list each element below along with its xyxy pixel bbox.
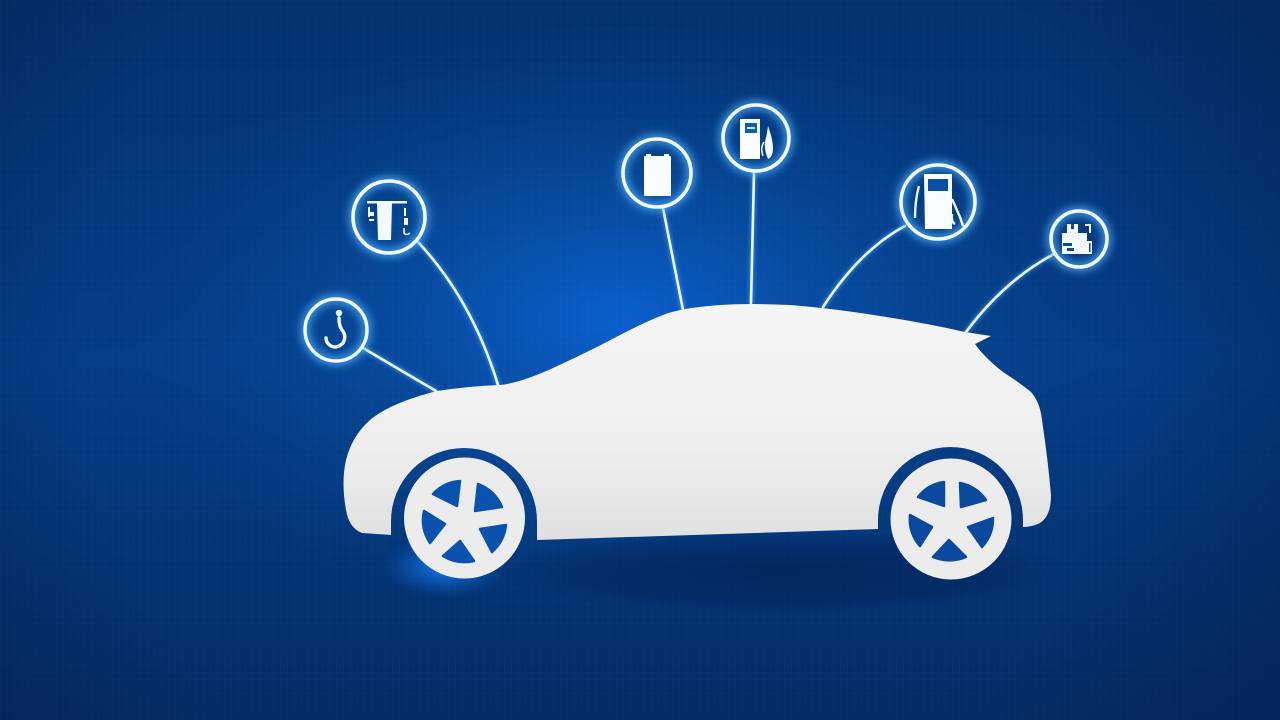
- icon: large fuel pump: [901, 165, 975, 239]
- front wheel: [404, 458, 525, 578]
- icon: tow crane: [353, 181, 425, 253]
- icon: battery: [623, 139, 691, 207]
- rear wheel: [890, 458, 1012, 580]
- icon: fuel pump: [723, 105, 789, 171]
- glow under front wheel: [383, 534, 507, 598]
- car body: [344, 304, 1051, 540]
- icon: service station: [1051, 211, 1107, 267]
- ground shadow under car: [490, 530, 1070, 614]
- connector lines: [363, 173, 1054, 391]
- icon: tow hook: [305, 299, 367, 361]
